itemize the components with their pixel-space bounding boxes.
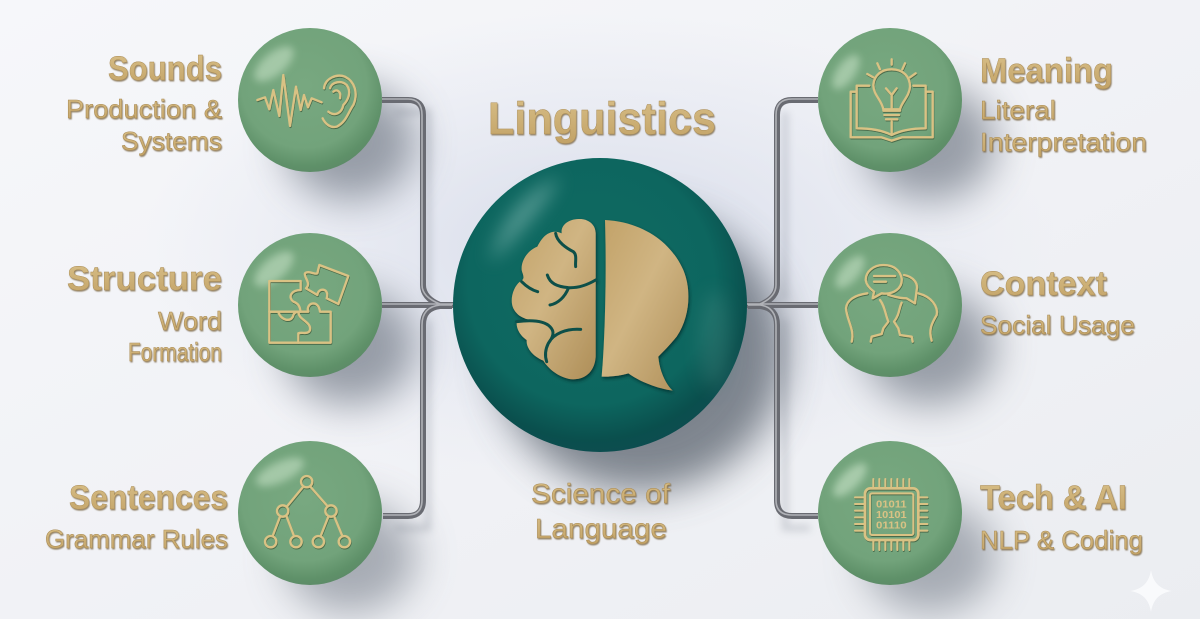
- text: Context: Context: [980, 265, 1107, 303]
- subtitle: Science of Language: Science of: [531, 478, 670, 509]
- subtitle: Science of Language: Language: [535, 513, 667, 544]
- icon: binary microchip: [855, 479, 927, 550]
- node: Sounds: [238, 28, 382, 172]
- icon: brain and speech bubble: [512, 219, 688, 391]
- text: Sounds: Sounds: [108, 50, 222, 88]
- title: Linguistics: [488, 93, 716, 144]
- icon: sound wave and ear: [257, 75, 356, 127]
- text: Meaning: [980, 52, 1147, 157]
- node: Meaning: [818, 28, 962, 172]
- text: Sentences: Grammar Rules: [45, 524, 228, 554]
- node: Structure: [238, 233, 382, 377]
- text: Meaning: Interpretation: [980, 127, 1147, 157]
- icon: binary microchip: 10101: [876, 510, 907, 521]
- icon: sparkle watermark: [1130, 570, 1172, 612]
- node: Sentences: [238, 441, 382, 585]
- text: Context: Social Usage: [980, 310, 1135, 340]
- text: Structure: Formation: [128, 337, 222, 367]
- icon: puzzle pieces: [269, 265, 348, 343]
- text: Structure: Word: [158, 306, 222, 336]
- text: Structure: Structure: [67, 260, 222, 298]
- icon: syntax tree: [265, 476, 350, 547]
- text: Sentences: [45, 479, 228, 554]
- text: Meaning: Meaning: [980, 52, 1113, 90]
- text: Tech and AI: [980, 479, 1143, 555]
- icon: binary microchip: 01110: [876, 521, 907, 532]
- node: Tech and AI: [818, 441, 962, 585]
- text: Sounds: [66, 50, 222, 156]
- text: Sounds: Production &: [66, 94, 222, 124]
- text: Tech and AI: Tech & AI: [980, 479, 1127, 517]
- connector pipes: left: [382, 99, 454, 516]
- central sphere with brain and speech icon: [453, 158, 747, 452]
- text: Sentences: Sentences: [69, 479, 228, 517]
- sphere shadows: [284, 84, 996, 613]
- icon: book and light bulb: [851, 59, 933, 141]
- text: Context: [980, 265, 1135, 340]
- text: Structure: [67, 260, 222, 367]
- connector pipes: right: [746, 99, 818, 516]
- node: Context: [818, 233, 962, 377]
- subtitle: Science of Language: [531, 478, 670, 544]
- icon: two people talking: [846, 265, 937, 342]
- text: Sounds: Systems: [121, 126, 222, 156]
- icon: binary microchip: 01011: [876, 499, 907, 510]
- text: Tech and AI: NLP & Coding: [980, 525, 1143, 555]
- text: Meaning: Literal: [980, 95, 1056, 125]
